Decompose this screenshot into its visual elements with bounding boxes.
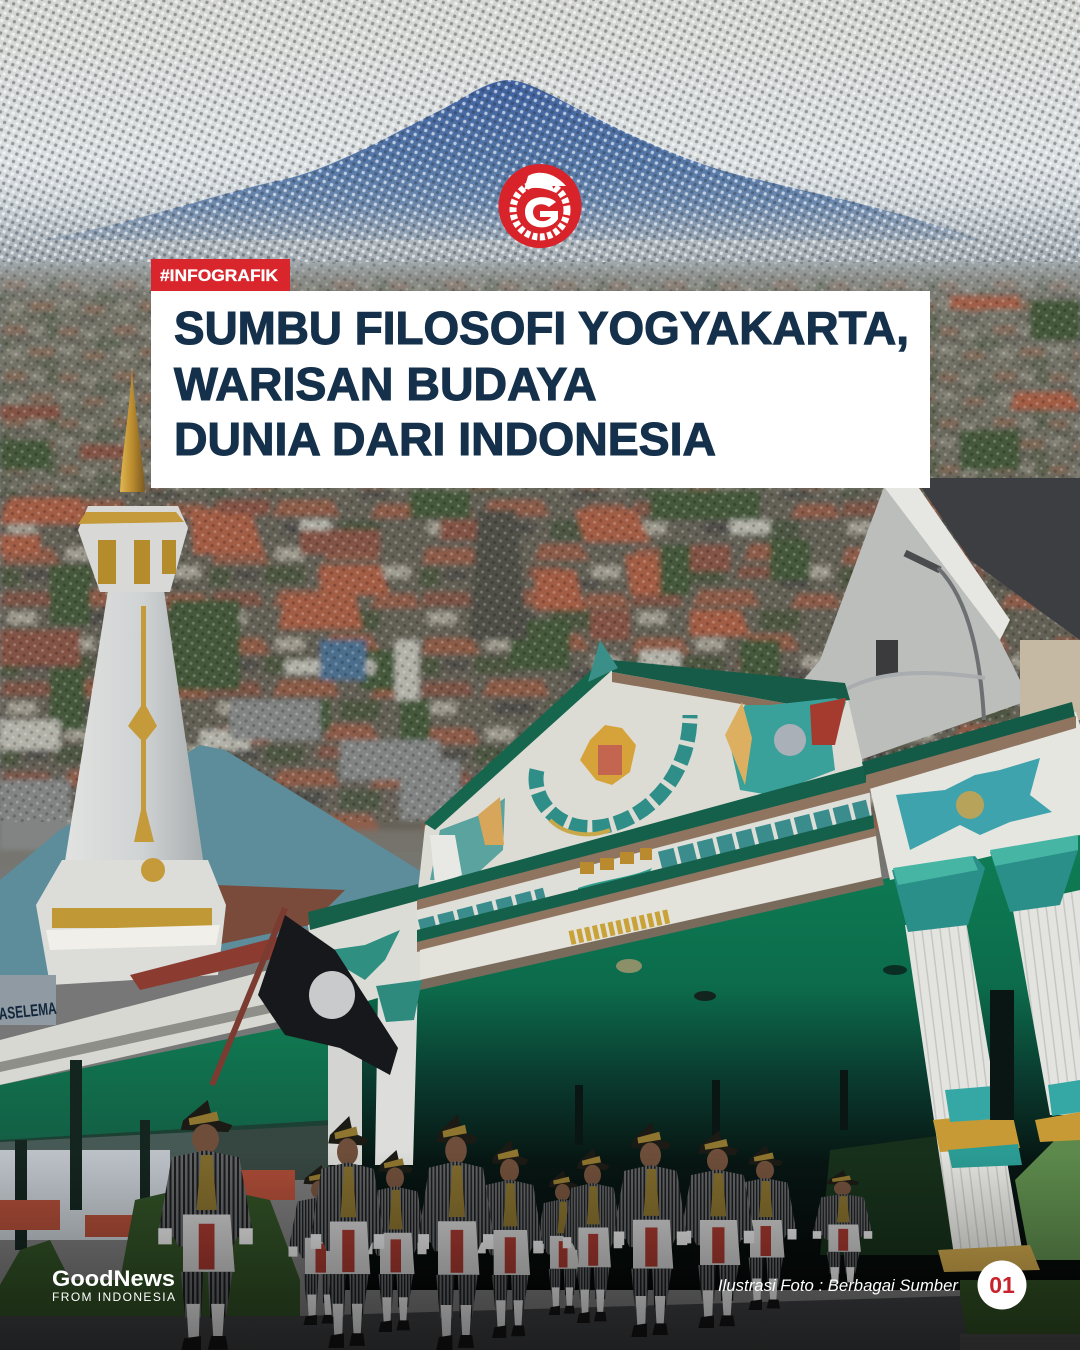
- tower shaft: [62, 590, 206, 880]
- frieze and cornices: [308, 702, 1080, 990]
- dark interior pillars: [575, 990, 1014, 1145]
- GoodNews from Indonesia wordmark: FROM INDONESIA: [52, 1290, 175, 1304]
- tower base: [36, 860, 226, 985]
- flag bearer with black flag: [158, 908, 398, 1350]
- GoodNews from Indonesia wordmark: [52, 1266, 175, 1304]
- left small columns: [328, 980, 422, 1165]
- flag pole: [212, 908, 285, 1085]
- signage on wall: ASELEMA: [0, 999, 58, 1024]
- lamps on the ceiling: [616, 959, 907, 1001]
- photo background: city rooftops: [0, 262, 1080, 870]
- column one: [905, 915, 1023, 1262]
- white beam: [420, 836, 882, 985]
- main pavilion dark interior and green ceiling: [330, 830, 1080, 1290]
- left pavilion: [0, 930, 332, 1250]
- logo badge: [498, 164, 582, 248]
- ground: [0, 1296, 970, 1350]
- frieze background: [417, 775, 873, 942]
- frieze scrollwork: [420, 808, 868, 928]
- Javanese inscription: [570, 916, 670, 938]
- brown tiled roof: [215, 885, 345, 945]
- title box: [151, 291, 930, 488]
- photo background: sky: [0, 0, 1080, 270]
- signage on wall: [0, 975, 58, 1025]
- column two: [1012, 890, 1080, 1115]
- marching guards: [288, 1114, 872, 1350]
- ground right kerb: [960, 1334, 1080, 1350]
- finial: [588, 640, 618, 682]
- hedges: [0, 1185, 1080, 1335]
- right columns: [892, 835, 1080, 1272]
- frieze lower green cornice: [417, 815, 875, 950]
- hashtag tag: [151, 259, 290, 292]
- pier cornice: [862, 702, 1076, 782]
- right rake: [612, 660, 850, 706]
- gold ornaments on shaft: [128, 606, 157, 842]
- photo background: horizon haze: [0, 205, 1080, 305]
- title: SUMBU FILOSOFI YOGYAKARTA,: [174, 302, 909, 354]
- garuda left: [430, 797, 505, 885]
- right grey gable building: [795, 478, 1080, 760]
- garuda right: [725, 698, 846, 795]
- wreath: [536, 715, 690, 828]
- Tugu Yogyakarta monument: [36, 366, 226, 985]
- left wing cornice: [308, 884, 420, 930]
- pier block: [866, 712, 1080, 880]
- teal ornament on the left wing: [330, 930, 400, 980]
- crocodile relief: [578, 868, 652, 892]
- page number badge: 01: [989, 1272, 1015, 1298]
- pediment of the palace gate: [417, 640, 866, 900]
- photo credit: Ilustrasi Foto : Berbagai Sumber: [718, 1276, 959, 1295]
- left wing upper wall: [308, 892, 422, 1015]
- gold emblem: [580, 725, 636, 785]
- black flag: [258, 915, 398, 1075]
- GoodNews from Indonesia wordmark: GoodNews: [52, 1266, 175, 1291]
- bearer: [158, 1100, 253, 1350]
- pier ornament: [896, 758, 1052, 850]
- tower capital: [78, 506, 188, 592]
- spire: [120, 366, 145, 492]
- pediment white face: [417, 668, 866, 900]
- bottom vignette: [0, 1150, 1080, 1350]
- page number badge: [978, 1260, 1026, 1310]
- halftone texture over the city: [0, 262, 1080, 822]
- title: DUNIA DARI INDONESIA: [174, 413, 716, 465]
- halftone texture over the sky: [0, 0, 1080, 262]
- blue roof behind the monument: [0, 745, 435, 990]
- photo background: Mount Merapi: [40, 80, 980, 240]
- title: WARISAN BUDAYA: [174, 358, 595, 410]
- hashtag tag: #INFOGRAFIK: [160, 267, 278, 285]
- trees seen through the pavilion: [820, 1135, 1080, 1260]
- left rake: [424, 662, 610, 830]
- frieze upper green cornice: [417, 765, 872, 905]
